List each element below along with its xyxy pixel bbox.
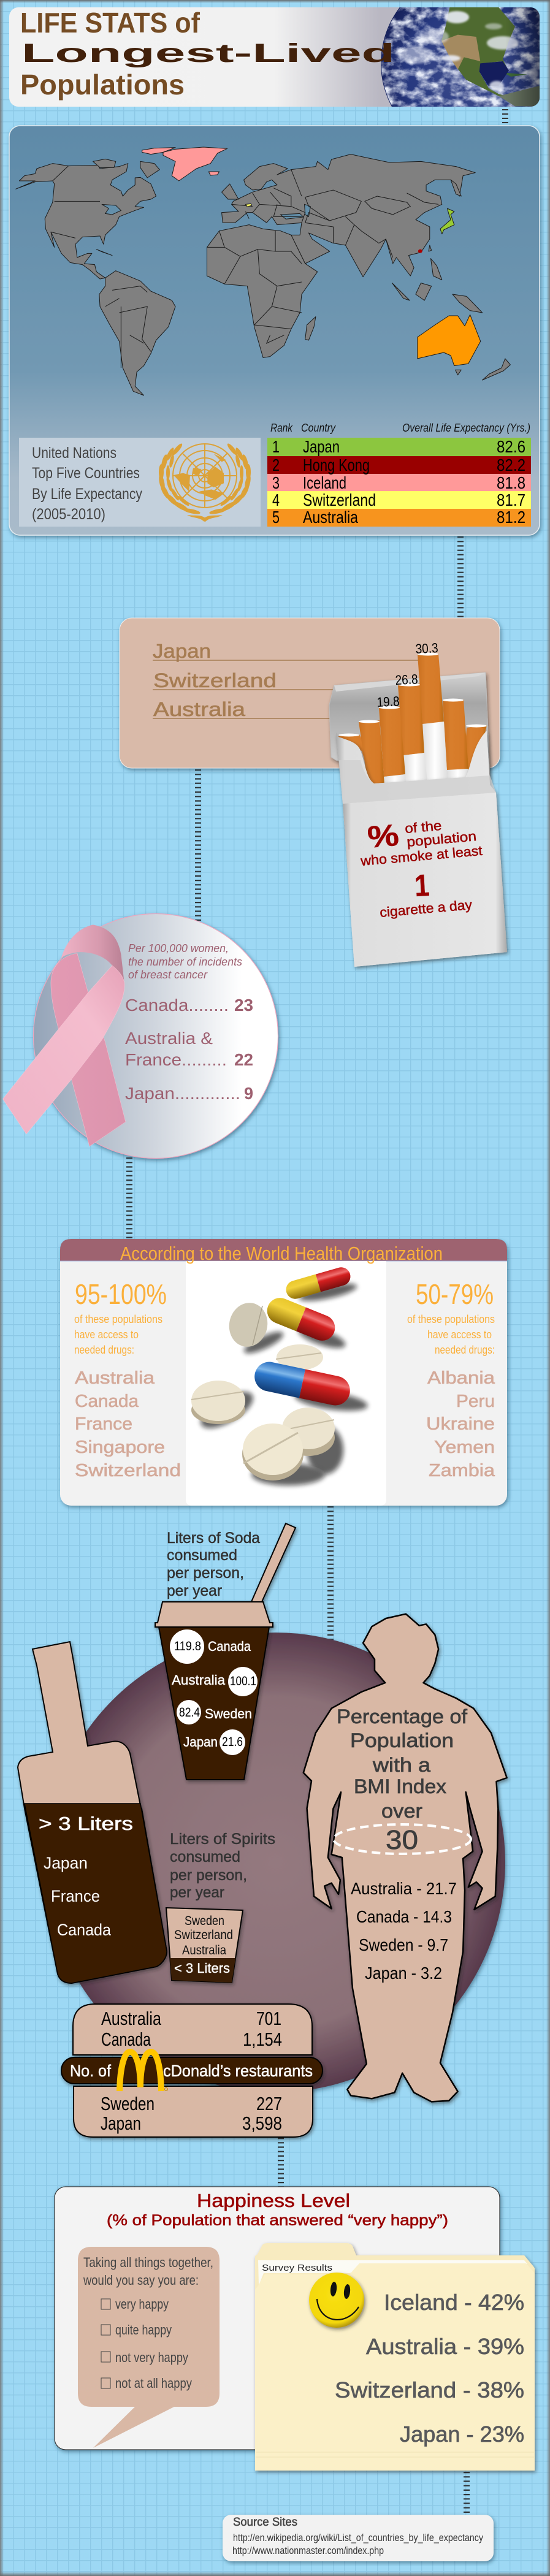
table header [270, 422, 530, 434]
table: top five countries: Hong Kong [303, 455, 370, 474]
text block: 50-79% column: Peru [456, 1392, 495, 1411]
text block: more than 3 liters: France [51, 1887, 100, 1905]
text block: more than 3 liters [39, 1813, 133, 1939]
icon: shot glass: Sweden [185, 1914, 224, 1928]
text block: BMI values: Canada - 14.3 [356, 1907, 452, 1926]
table: top five countries: 82.6 [497, 437, 525, 456]
icon: United Nations emblem [158, 443, 252, 522]
text block: 50-79% column: Ukraine [426, 1414, 495, 1434]
tablet: standing [225, 1299, 272, 1351]
tablet: front [242, 1423, 304, 1480]
text block: 50-79% column: Yemen [434, 1438, 495, 1457]
title: Populations [20, 69, 185, 101]
text block: McDonald's label: No. of [70, 2062, 111, 2080]
panel: source sites: Source Sites [233, 2516, 297, 2529]
speech bubble: survey question [78, 2247, 220, 2448]
text block: UN caption: Top Five Countries [32, 465, 140, 482]
soda values: Australia [172, 1672, 226, 1688]
table: top five countries: 2 [272, 455, 280, 474]
text block: breast cancer values: Australia & [125, 1029, 213, 1048]
speech bubble: survey question: quite happy [115, 2322, 172, 2338]
text block: McDonald's top values: Canada [101, 2029, 151, 2050]
panel: source sites: http://en.wikipedia.org/wiki/List_of_countries_by_life_expectancy [233, 2532, 483, 2544]
connector dashes: breast cancer to WHO [126, 1157, 132, 1239]
background disc: plum circle [45, 1633, 505, 2092]
world map [16, 147, 510, 395]
text block: UN caption: United Nations [32, 444, 116, 462]
text block: BMI values [351, 1879, 457, 1983]
text block: 95-100% column: have access to [74, 1328, 139, 1341]
text block: 50-79% column: Albania [427, 1368, 495, 1388]
panel: soda [155, 1523, 296, 1780]
panel: spirits [18, 1642, 275, 1983]
soda values: 100.1 [230, 1674, 256, 1688]
table: top five countries: Iceland [303, 473, 346, 492]
table: top five countries: Australia [303, 508, 358, 527]
icon: survey folder [255, 2243, 535, 2471]
text block: breast cancer values: 23 [234, 996, 253, 1015]
text block: soda caption: consumed [167, 1547, 237, 1564]
table: top five countries: Switzerland [303, 490, 376, 509]
text block: BMI heading: 30 [386, 1825, 418, 1855]
icon: liquor bottle [18, 1642, 167, 1983]
text block: 95-100% column: 95-100% [75, 1278, 167, 1310]
text block: McDonald's top values: 1,154 [243, 2029, 282, 2050]
heading: WHO: According to the World Health Organization [120, 1243, 443, 1264]
text block: happiness results: Switzerland - 38% [335, 2377, 524, 2403]
country borders [51, 166, 438, 368]
text block: BMI values: Australia - 21.7 [351, 1879, 457, 1898]
text block: McDonald's label [70, 2062, 313, 2080]
table: top five countries: 1 [272, 437, 280, 456]
table header: Overall Life Expectancy (Yrs.) [402, 422, 530, 434]
connector dashes: happiness to sources [464, 2472, 470, 2515]
text block: 95-100% column: Canada [75, 1392, 139, 1411]
panel: World Health Organization drug access [60, 1239, 507, 1506]
text block: 50-79% column [407, 1278, 495, 1480]
text block: McDonald's bottom values: Sweden [101, 2093, 155, 2114]
table: top five countries: 4 [272, 490, 280, 509]
text block: more than 3 liters: > 3 Liters [39, 1813, 133, 1834]
text block: McDonald's top values: Australia [101, 2008, 162, 2029]
heading: happiness: (% of Population that answered “very happy”) [107, 2212, 448, 2229]
text block: 50-79% column: 50-79% [416, 1278, 494, 1310]
text block: soda caption: per person, [167, 1564, 244, 1582]
highlighted countries [142, 147, 481, 366]
table: top five countries [267, 422, 531, 527]
text block: breast cancer values: 9 [244, 1084, 253, 1103]
burger top bun [61, 2004, 323, 2137]
folder label: Survey Results [262, 2263, 332, 2273]
table: top five countries: 81.2 [497, 508, 525, 527]
text block: smoking country labels: Japan [153, 640, 211, 662]
text block: smoking country labels [153, 640, 277, 720]
text block: spirits caption: consumed [170, 1848, 240, 1865]
capsule: yellow and red middle [263, 1294, 339, 1344]
text block: happiness results [335, 2290, 524, 2447]
speech bubble: survey question: Taking all things together, [83, 2255, 213, 2270]
text block: breast cancer intro: the number of incidents [128, 956, 242, 968]
table header: Rank [270, 422, 293, 434]
text block: 95-100% column: Singapore [75, 1438, 165, 1457]
text block: pack label: population [406, 828, 477, 850]
icon: pills and capsules [191, 1265, 369, 1485]
panel: header [9, 7, 540, 107]
text block: pack label: cigarette a day [379, 897, 473, 920]
text block: McDonald's bottom values [101, 2093, 282, 2134]
table: top five countries: 81.8 [497, 473, 525, 492]
text block: UN caption [32, 444, 142, 523]
text block: spirits caption [170, 1831, 275, 1901]
panel: BMI figure [304, 1614, 507, 2102]
soda values: Sweden [205, 1706, 252, 1721]
pack back [329, 673, 491, 794]
heading: happiness: Happiness Level [197, 2190, 350, 2211]
text block: breast cancer values: France......... [125, 1050, 227, 1069]
panel: happiness level [55, 2187, 535, 2471]
text block: pack label: who smoke at least [359, 843, 483, 869]
capsule: yellow and red top [284, 1265, 353, 1301]
connector dashes: McDonald's to happiness [278, 2138, 284, 2187]
text block: 95-100% column: needed drugs: [74, 1344, 134, 1356]
text block: 50-79% column: needed drugs: [435, 1344, 495, 1356]
soda values: 119.8 [174, 1639, 201, 1653]
text block: 50-79% column: of these populations [407, 1313, 495, 1325]
cigarette values: 19.8 [376, 693, 400, 710]
connector dashes: header to map [502, 110, 508, 123]
text block: breast cancer values: 22 [234, 1050, 253, 1069]
text block: 50-79% column: Zambia [429, 1461, 495, 1480]
table: top five countries: 81.7 [497, 490, 525, 509]
title: LIFE STATS of [20, 7, 201, 39]
table header: Country [301, 422, 336, 434]
icon: earth globe [381, 7, 540, 107]
text block: soda caption: per year [167, 1582, 222, 1599]
icon: golden arches [120, 2052, 168, 2091]
text block: McDonald's bottom values: 3,598 [242, 2113, 282, 2134]
text block: McDonald's bottom values: 227 [256, 2093, 282, 2114]
text block: UN caption: By Life Expectancy [32, 486, 142, 503]
text block: breast cancer intro: Per 100,000 women, [128, 942, 229, 955]
text block: breast cancer intro: of breast cancer [128, 969, 208, 981]
text block: 95-100% column: Australia [75, 1368, 155, 1388]
soda values: Canada [208, 1639, 251, 1654]
text block: pack label: of the [404, 818, 442, 836]
text block: more than 3 liters: Canada [57, 1921, 112, 1939]
text block: 50-79% column: have access to [427, 1328, 492, 1341]
icon: shot glass: Switzerland [174, 1928, 233, 1942]
speech bubble: survey question: not at all happy [115, 2376, 192, 2391]
text block: soda caption: Liters of Soda [167, 1530, 260, 1547]
text block: pack label: 1 [414, 868, 430, 903]
cigarette values [376, 640, 438, 710]
text block: pack label [359, 818, 483, 920]
icon: dashed waist ellipse [334, 1824, 471, 1854]
connector dashes: smoking to breast cancer [195, 769, 201, 923]
text block: smoking country labels: Switzerland [153, 669, 277, 692]
text block: BMI heading: with a [372, 1754, 430, 1776]
soda values: 82.4 [179, 1705, 200, 1720]
panel: source sites [223, 2515, 494, 2561]
icon: shot glass: < 3 Liters [174, 1961, 230, 1976]
panel: world map and life expectancy ranking [9, 126, 540, 535]
text block: breast cancer values: Japan............. [125, 1084, 240, 1103]
tablet: back lower [282, 1408, 335, 1456]
text block: BMI values: Sweden - 9.7 [359, 1935, 448, 1954]
speech bubble: survey question: would you say you are: [83, 2273, 199, 2288]
text block: spirits caption: per year [170, 1884, 224, 1901]
panel: source sites: http://www.nationmaster.com/index.php [232, 2545, 384, 2556]
table: top five countries: 5 [272, 508, 280, 527]
cigarettes [338, 652, 487, 784]
icon: shot glass [166, 1908, 243, 1983]
panel: smoking [120, 618, 500, 768]
text block: BMI heading: Percentage of [337, 1705, 467, 1728]
panel: breast cancer disc [3, 913, 278, 1159]
text block: 95-100% column: Switzerland [75, 1461, 181, 1480]
text block: 95-100% column [74, 1278, 181, 1480]
table: top five countries: 82.2 [497, 455, 525, 474]
icon: shot glass: Australia [182, 1943, 226, 1957]
title: Longest-Lived [21, 39, 395, 68]
text block: smoking country labels: Australia [153, 698, 245, 720]
text block: breast cancer values [125, 996, 253, 1103]
text block: more than 3 liters: Japan [44, 1854, 88, 1872]
land: North America [441, 7, 540, 106]
text block: spirits caption: per person, [170, 1867, 247, 1884]
speech bubble: survey question: not very happy [115, 2350, 188, 2365]
text block: BMI heading: over [381, 1800, 422, 1822]
table: top five countries: 3 [272, 473, 280, 492]
icon: soda cup [155, 1523, 296, 1780]
heading: happiness [107, 2190, 448, 2229]
pack front and flap [336, 731, 507, 967]
icon: pink ribbon [3, 924, 126, 1146]
table: top five countries: Japan [303, 437, 340, 456]
text block: happiness results: Japan - 23% [400, 2422, 524, 2447]
title [20, 7, 395, 101]
text block: McDonald's top values: 701 [256, 2008, 281, 2029]
text block: BMI heading [337, 1705, 467, 1855]
soda values [170, 1629, 258, 1755]
capsule: blue and red [252, 1359, 353, 1408]
connector dashes: WHO to lifestyle [327, 1506, 334, 1640]
text block: happiness results: Australia - 39% [366, 2334, 524, 2359]
connector dashes: map to smoking panel [457, 536, 464, 617]
legend: United Nations box [19, 438, 261, 527]
icon: person silhouette [304, 1614, 507, 2102]
text block: spirits caption: Liters of Spirits [170, 1831, 275, 1848]
text block: 95-100% column: of these populations [74, 1313, 162, 1325]
tablet: left [191, 1381, 245, 1424]
inland water [102, 204, 310, 219]
icon: smiley button [309, 2273, 364, 2328]
tablet: back middle [276, 1344, 323, 1370]
cigarette values: 26.8 [395, 671, 418, 688]
text block: BMI values: Japan - 3.2 [365, 1964, 442, 1983]
icon: cigarette pack with values [329, 640, 507, 967]
panel: McDonald's burger [61, 2004, 323, 2137]
soda values: 21.6 [222, 1735, 243, 1749]
soda values: Japan [183, 1734, 218, 1750]
text block: UN caption: (2005-2010) [32, 506, 105, 523]
speech bubble: survey question: very happy [115, 2296, 169, 2312]
text block: McDonald's bottom values: Japan [101, 2113, 141, 2134]
cigarette values: 30.3 [415, 640, 438, 657]
text block: happiness results: Iceland - 42% [384, 2290, 524, 2315]
text block: breast cancer intro [128, 942, 242, 981]
text block: McDonald's top values [101, 2008, 282, 2050]
text block: BMI heading: Population [350, 1729, 454, 1751]
text block: BMI heading: BMI Index [354, 1775, 446, 1797]
text block: soda caption [167, 1530, 260, 1599]
text block: 95-100% column: France [75, 1414, 132, 1434]
text block: pack label: % [366, 818, 400, 855]
text block: breast cancer values: Canada........ [125, 996, 229, 1015]
text block: McDonald's label: cDonald’s restaurants [163, 2062, 313, 2080]
